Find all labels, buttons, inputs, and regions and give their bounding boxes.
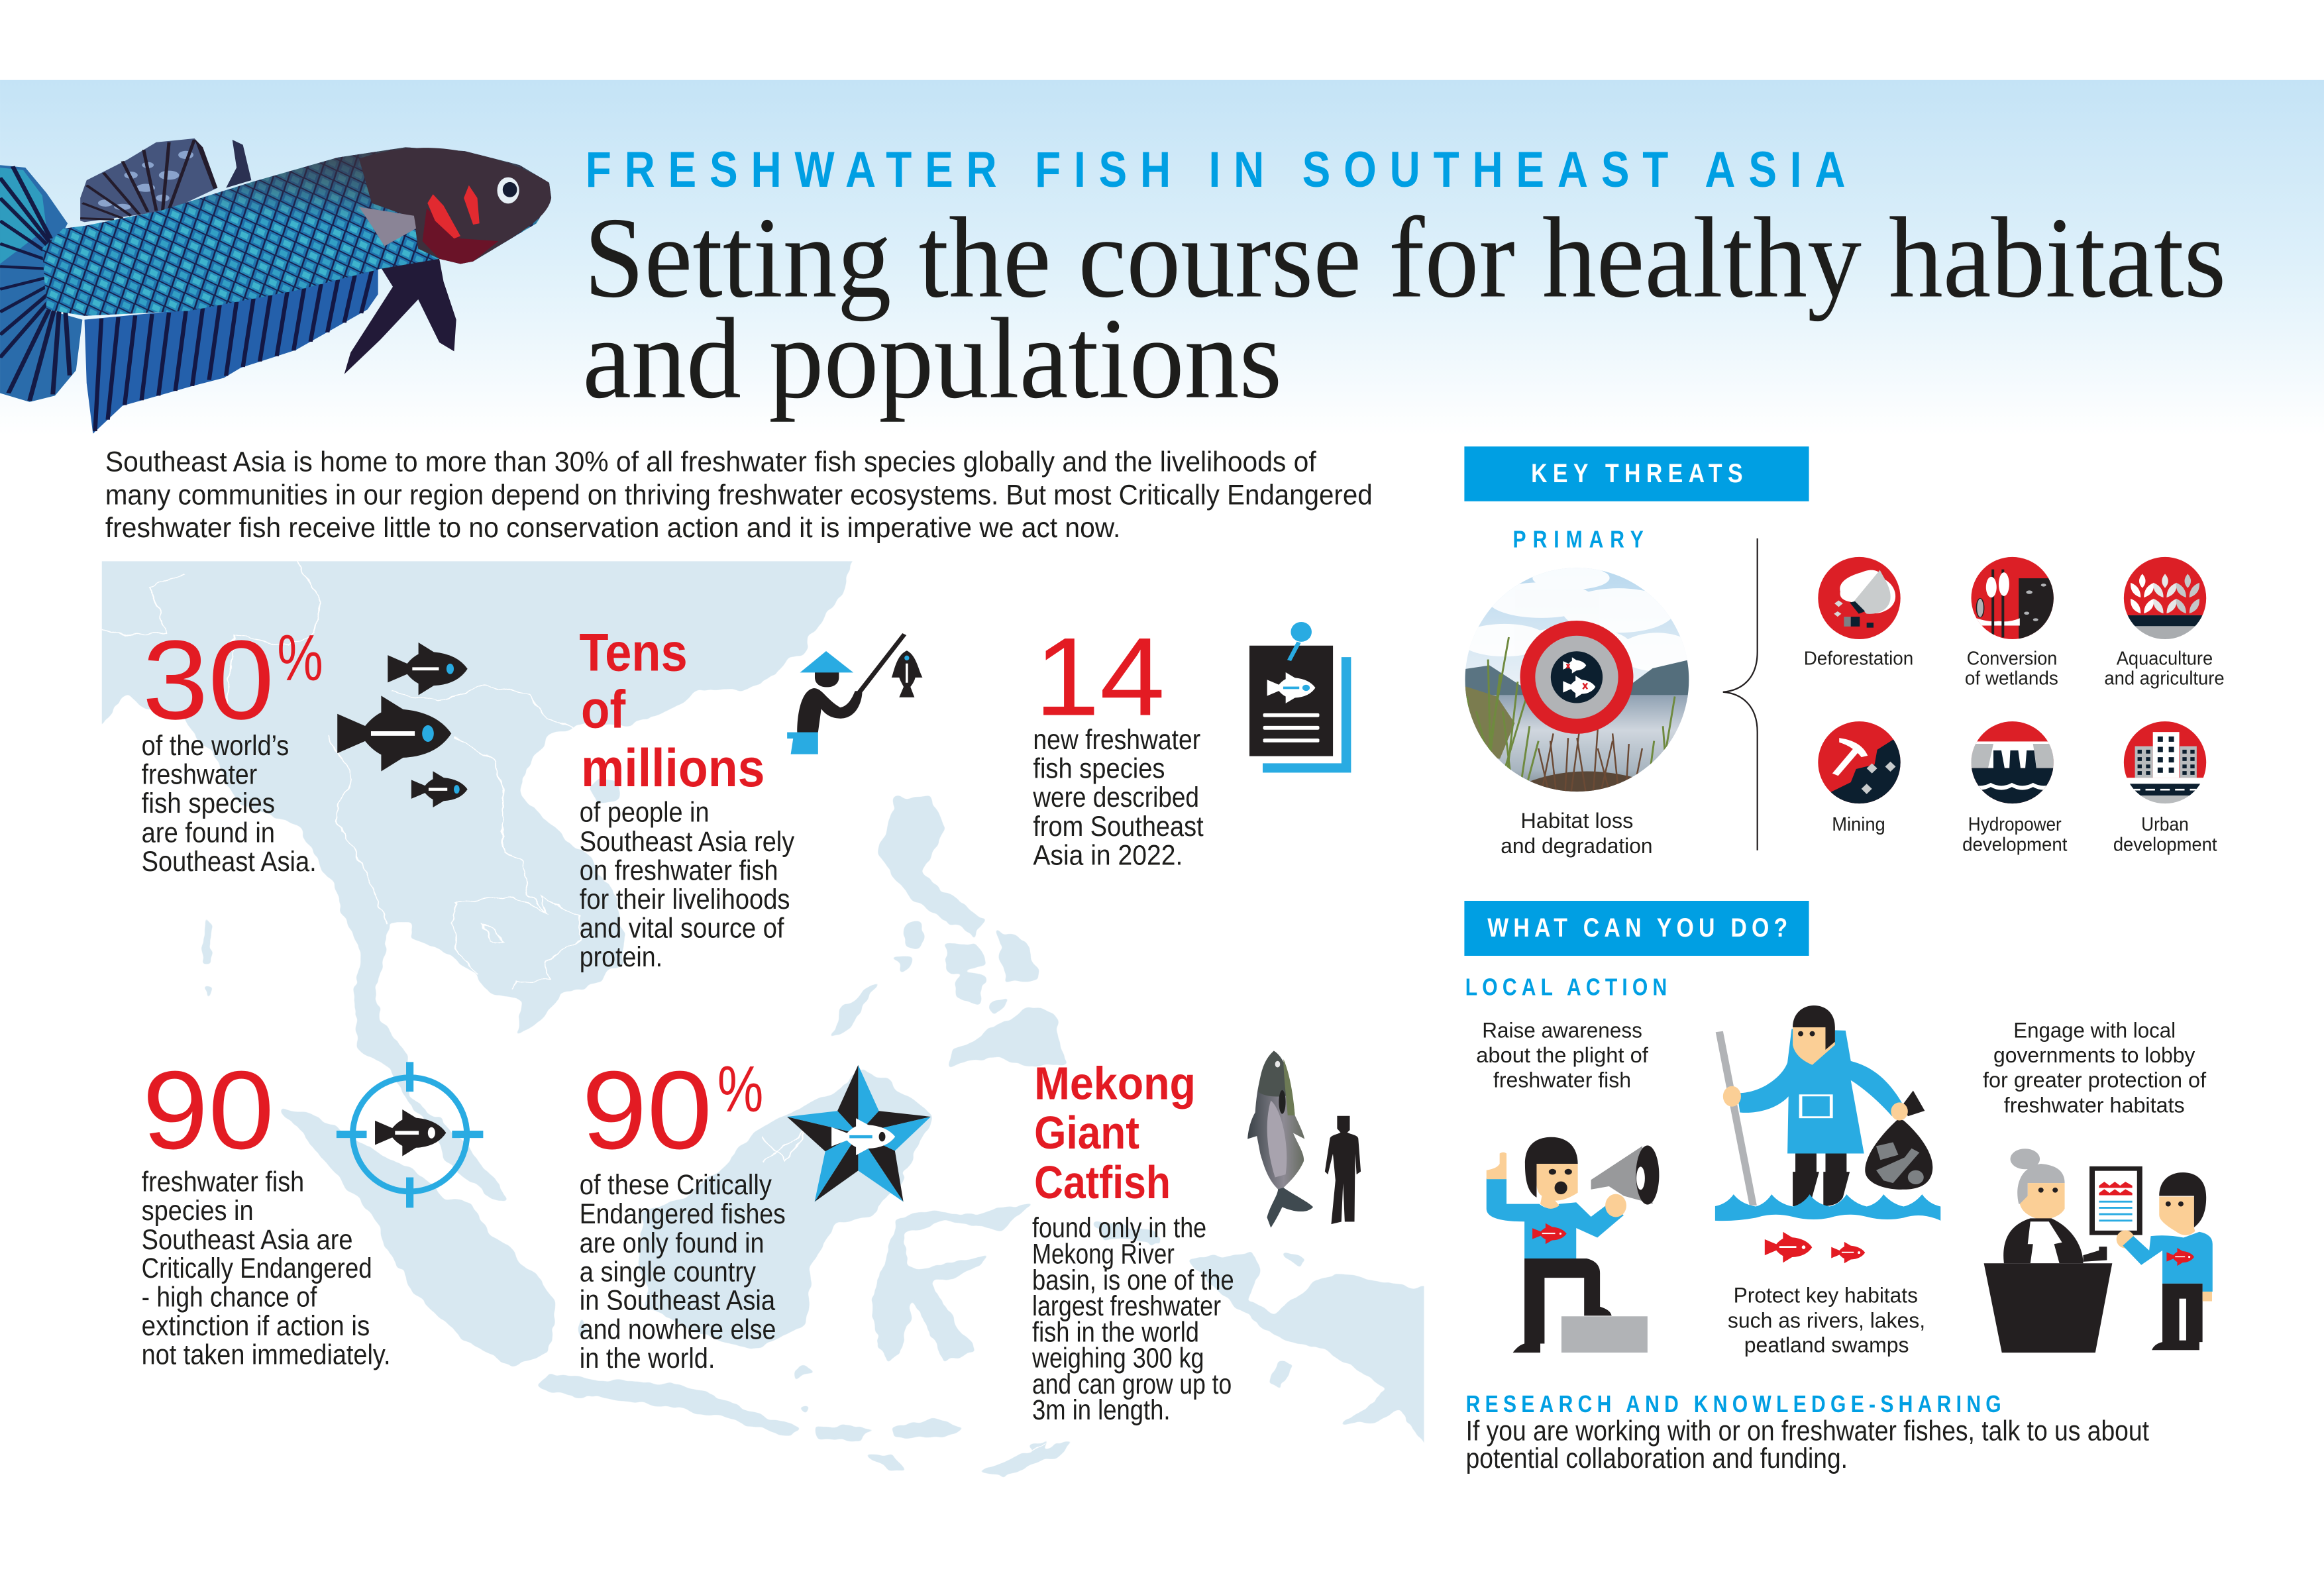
- body with scales: [42, 147, 551, 316]
- head: [359, 148, 551, 264]
- description: [580, 1170, 786, 1374]
- description: of these Critically: [580, 1170, 772, 1201]
- description: found only in the: [1032, 1213, 1206, 1244]
- stat: Mekong Giant Catfish: [1031, 1057, 1234, 1426]
- description: of the world’s: [142, 731, 289, 762]
- icon: urban: [2124, 721, 2206, 804]
- text: protect key habitats: Protect key habitats: [1734, 1284, 1918, 1308]
- illustration: betta fish photo: [0, 138, 551, 434]
- percent sign: %: [277, 621, 323, 694]
- intro paragraph: freshwater fish receive little to no conservation action and it is imperative we act now.: [105, 513, 1120, 544]
- text: raise awareness: about the plight of: [1476, 1043, 1649, 1067]
- description: for their livelihoods: [580, 884, 790, 915]
- icon: wetlands: [1972, 556, 2054, 639]
- description: in the world.: [580, 1343, 715, 1374]
- red heading: of: [581, 680, 625, 739]
- map of Southeast Asia: [66, 533, 1451, 1477]
- section bar label: WHAT CAN YOU DO?: [1487, 912, 1787, 943]
- red heading: Mekong: [1034, 1057, 1196, 1109]
- description: of people in: [580, 797, 710, 829]
- icon: document with pin: [1249, 622, 1351, 772]
- text: engage with governments: governments to lobby: [1993, 1043, 2195, 1067]
- description: extinction if action is: [142, 1311, 370, 1342]
- intro paragraph: [105, 446, 1373, 544]
- description: and nowhere else: [580, 1315, 776, 1346]
- description: were described: [1032, 782, 1199, 813]
- panel: key threats: [1460, 446, 2225, 858]
- icon: three fish: [337, 642, 468, 807]
- icon: star with fish: [787, 1065, 931, 1202]
- description: largest freshwater: [1032, 1291, 1221, 1322]
- icon: target rings with fish: [1520, 621, 1633, 734]
- description: species in: [142, 1196, 254, 1227]
- description: weighing 300 kg: [1031, 1343, 1204, 1374]
- section bar label: KEY THREATS: [1531, 458, 1743, 488]
- intro paragraph: many communities in our region depend on thriving freshwater ecosystems. But most Critically Endangered: [105, 480, 1373, 511]
- description: from Southeast: [1033, 811, 1204, 843]
- description: freshwater fish: [142, 1167, 304, 1198]
- threat labels: and agriculture: [2104, 668, 2225, 690]
- photo: lake habitat: [1465, 568, 1689, 792]
- description: in Southeast Asia: [580, 1286, 775, 1317]
- stat: tens of millions: [579, 623, 795, 973]
- description: not taken immediately.: [142, 1340, 391, 1371]
- red gill mark: [427, 185, 480, 238]
- section bar: [1464, 901, 1809, 956]
- red heading: Tens: [579, 623, 688, 682]
- number 14: 14: [1035, 614, 1165, 739]
- section bar: [1464, 446, 1809, 501]
- pectoral fin: [359, 207, 416, 246]
- icon: aquaculture: [2124, 556, 2206, 639]
- description: Endangered fishes: [580, 1199, 786, 1230]
- text: raise awareness: Raise awareness: [1482, 1018, 1642, 1042]
- description: [142, 731, 317, 878]
- header gradient band: [0, 80, 2324, 436]
- stat: 90 species: [142, 1048, 391, 1371]
- description: [580, 797, 795, 973]
- primary label: PRIMARY: [1513, 527, 1644, 553]
- label: habitat loss: Habitat loss: [1520, 809, 1633, 833]
- icon: catfish and person scale: [1247, 1051, 1361, 1227]
- body text: potential collaboration and funding.: [1466, 1443, 1848, 1474]
- threat labels: Hydropower: [1968, 814, 2062, 835]
- threat labels: Aquaculture: [2117, 648, 2213, 669]
- icon: fish in crosshair: [337, 1062, 483, 1207]
- text: raise awareness: [1476, 1018, 1649, 1092]
- main title: Setting the course for healthy habitats: [584, 193, 2226, 321]
- description: 3m in length.: [1032, 1395, 1171, 1426]
- person silhouette: [1325, 1116, 1361, 1224]
- text: raise awareness: freshwater fish: [1493, 1068, 1631, 1092]
- eye: [497, 178, 519, 203]
- text: engage with governments: for greater protection of: [1983, 1068, 2207, 1092]
- description: are only found in: [580, 1228, 765, 1259]
- main title: and populations: [582, 295, 1282, 423]
- stat: 30 percent: [142, 617, 323, 878]
- research and knowledge-sharing: [1466, 1392, 2149, 1474]
- icon: deforestation: [1818, 556, 1901, 639]
- number 90: 90: [142, 1048, 274, 1172]
- body shading: [42, 147, 551, 316]
- description: fish in the world: [1032, 1317, 1199, 1348]
- text: protect key habitats: peatland swamps: [1744, 1333, 1909, 1357]
- red heading: [1034, 1057, 1196, 1208]
- threat labels: [1804, 648, 2225, 856]
- catfish: [1247, 1051, 1313, 1227]
- illustrations: people: [1487, 1005, 2213, 1353]
- text: engage with governments: [1983, 1018, 2207, 1117]
- description: Asia in 2022.: [1033, 840, 1183, 871]
- illustration: person with megaphone: [1487, 1137, 1659, 1353]
- text: engage with governments: freshwater habitats: [2004, 1093, 2185, 1117]
- illustration: judge and citizen: [1984, 1149, 2213, 1353]
- description: Critically Endangered: [142, 1253, 372, 1284]
- anal fin: [85, 269, 378, 434]
- text: protect key habitats: [1728, 1284, 1925, 1357]
- local action label: LOCAL ACTION: [1465, 974, 1667, 1001]
- pupil: [503, 182, 517, 197]
- dorsal spine: [226, 140, 251, 188]
- description: Mekong River: [1032, 1239, 1175, 1270]
- red heading: [579, 623, 765, 798]
- stat: 14 new species: [1032, 614, 1204, 871]
- red heading: Catfish: [1034, 1156, 1171, 1208]
- body text: If you are working with or on freshwater fishes, talk to us about: [1466, 1416, 2149, 1447]
- description: fish species: [142, 788, 275, 819]
- threat labels: Mining: [1832, 814, 1885, 835]
- description: [142, 1167, 391, 1371]
- threat labels: of wetlands: [1965, 668, 2058, 690]
- percent sign: %: [717, 1052, 763, 1125]
- description: [1031, 1213, 1234, 1426]
- description: Southeast Asia rely: [580, 827, 795, 858]
- number 30: 30: [142, 617, 274, 743]
- threat labels: Conversion: [1967, 648, 2057, 669]
- icon: fisherman: [787, 633, 922, 754]
- label: habitat loss: and degradation: [1501, 834, 1653, 858]
- description: and vital source of: [580, 913, 784, 944]
- intro paragraph: Southeast Asia is home to more than 30% of all freshwater fish species globally and the livelihoods of: [105, 446, 1316, 478]
- text: engage with governments: Engage with local: [2013, 1018, 2176, 1042]
- description: and can grow up to: [1032, 1369, 1232, 1400]
- threat labels: Deforestation: [1804, 648, 1913, 669]
- description: [1032, 725, 1204, 871]
- icon: hydropower: [1972, 721, 2054, 804]
- subheading: RESEARCH AND KNOWLEDGE-SHARING: [1466, 1392, 2001, 1418]
- threat icons grid: [1814, 554, 2210, 809]
- main title: [582, 193, 2226, 423]
- description: a single country: [580, 1257, 757, 1288]
- icon: mining: [1818, 721, 1901, 804]
- description: fish species: [1033, 754, 1165, 785]
- description: - high chance of: [142, 1282, 317, 1313]
- eyebrow heading: FRESHWATER FISH IN SOUTHEAST ASIA: [586, 141, 1846, 197]
- body text: [1466, 1416, 2149, 1474]
- label: habitat loss: [1501, 809, 1653, 858]
- red heading: millions: [581, 739, 765, 798]
- throat: [423, 208, 498, 264]
- text: protect key habitats: such as rivers, lakes,: [1728, 1308, 1925, 1332]
- dorsal fin: [80, 138, 217, 222]
- number 90: 90: [582, 1048, 712, 1172]
- description: Southeast Asia.: [142, 847, 317, 878]
- description: protein.: [580, 942, 662, 973]
- description: freshwater: [142, 759, 257, 790]
- description: on freshwater fish: [580, 855, 778, 886]
- description: are found in: [142, 817, 275, 848]
- threat labels: development: [1962, 835, 2067, 856]
- red heading: Giant: [1034, 1107, 1139, 1158]
- description: Southeast Asia are: [142, 1225, 352, 1256]
- tail fin: [0, 165, 82, 402]
- bracket: [1723, 539, 1758, 850]
- stat: 90 percent: [580, 1048, 786, 1374]
- threat labels: development: [2113, 835, 2217, 856]
- description: new freshwater: [1033, 725, 1200, 756]
- panel: what can you do: [1464, 901, 2213, 1474]
- pelvic fin: [344, 259, 456, 374]
- illustration: person cleaning river: [1715, 1005, 1940, 1263]
- description: basin, is one of the: [1032, 1265, 1234, 1296]
- threat labels: Urban: [2141, 814, 2189, 835]
